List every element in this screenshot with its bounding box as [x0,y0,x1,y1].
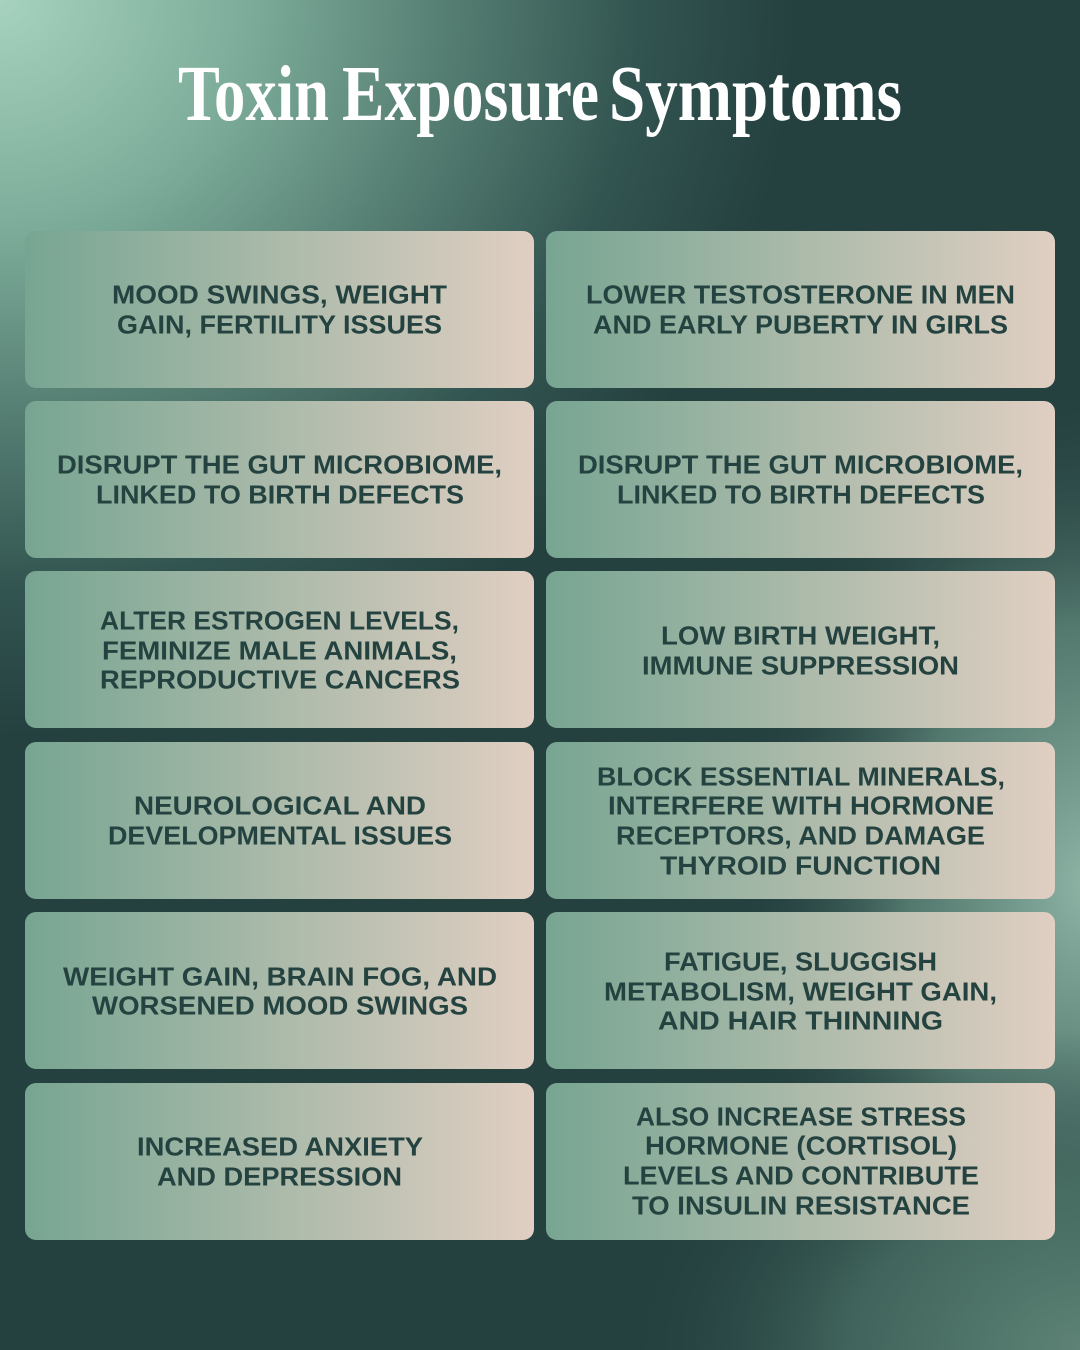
card: essential minerals: RECEPTORS, AND DAMAGE [616,820,985,850]
card: gut microbiome left: LINKED TO BIRTH DEFECTS [96,479,464,509]
card: anxiety and depression: AND DEPRESSION [157,1161,402,1191]
title: Symptoms [609,51,902,138]
card: stress hormone: LEVELS AND CONTRIBUTE [623,1160,979,1190]
card: stress hormone: HORMONE (CORTISOL) [645,1130,957,1160]
card: weight gain brain fog [25,912,534,1069]
card: essential minerals [546,742,1055,899]
card: fatigue: FATIGUE, SLUGGISH [664,946,937,976]
title: Exposure [342,51,599,138]
card: essential minerals: INTERFERE WITH HORMONE [608,790,994,820]
card: fatigue: AND HAIR THINNING [658,1005,943,1035]
card: stress hormone [546,1083,1055,1240]
title: Toxin [178,51,329,138]
card: gut microbiome right: LINKED TO BIRTH DEFECTS [617,479,985,509]
card: mood swings [25,231,534,388]
card: fatigue [546,912,1055,1069]
card: mood swings: MOOD SWINGS, WEIGHT [112,279,447,309]
card: lower testosterone: LOWER TESTOSTERONE IN MEN [586,279,1015,309]
card: anxiety and depression [25,1083,534,1240]
card: estrogen levels: FEMINIZE MALE ANIMALS, [102,635,457,665]
card: stress hormone: ALSO INCREASE STRESS [636,1101,966,1131]
card: stress hormone: TO INSULIN RESISTANCE [632,1190,970,1220]
card: estrogen levels [25,571,534,728]
card: neurological issues: DEVELOPMENTAL ISSUES [108,820,452,850]
card: lower testosterone: AND EARLY PUBERTY IN GIRLS [593,309,1008,339]
card: gut microbiome right: DISRUPT THE GUT MICROBIOME, [578,449,1023,479]
card: estrogen levels: ALTER ESTROGEN LEVELS, [100,605,459,635]
card: lower testosterone [546,231,1055,388]
card: weight gain brain fog: WEIGHT GAIN, BRAIN FOG, AND [63,961,497,991]
card: essential minerals: THYROID FUNCTION [660,850,941,880]
card: gut microbiome right [546,401,1055,558]
card: neurological issues [25,742,534,899]
card: low birth weight: IMMUNE SUPPRESSION [642,650,959,680]
card: anxiety and depression: INCREASED ANXIETY [137,1131,423,1161]
card: fatigue: METABOLISM, WEIGHT GAIN, [604,976,997,1006]
card: estrogen levels: REPRODUCTIVE CANCERS [100,664,460,694]
card: neurological issues: NEUROLOGICAL AND [134,790,426,820]
card: low birth weight: LOW BIRTH WEIGHT, [661,620,940,650]
card: essential minerals: BLOCK ESSENTIAL MINERALS, [597,761,1005,791]
card: gut microbiome left [25,401,534,558]
card: mood swings: GAIN, FERTILITY ISSUES [117,309,442,339]
card: low birth weight [546,571,1055,728]
card: gut microbiome left: DISRUPT THE GUT MICROBIOME, [57,449,502,479]
card: weight gain brain fog: WORSENED MOOD SWINGS [92,990,468,1020]
